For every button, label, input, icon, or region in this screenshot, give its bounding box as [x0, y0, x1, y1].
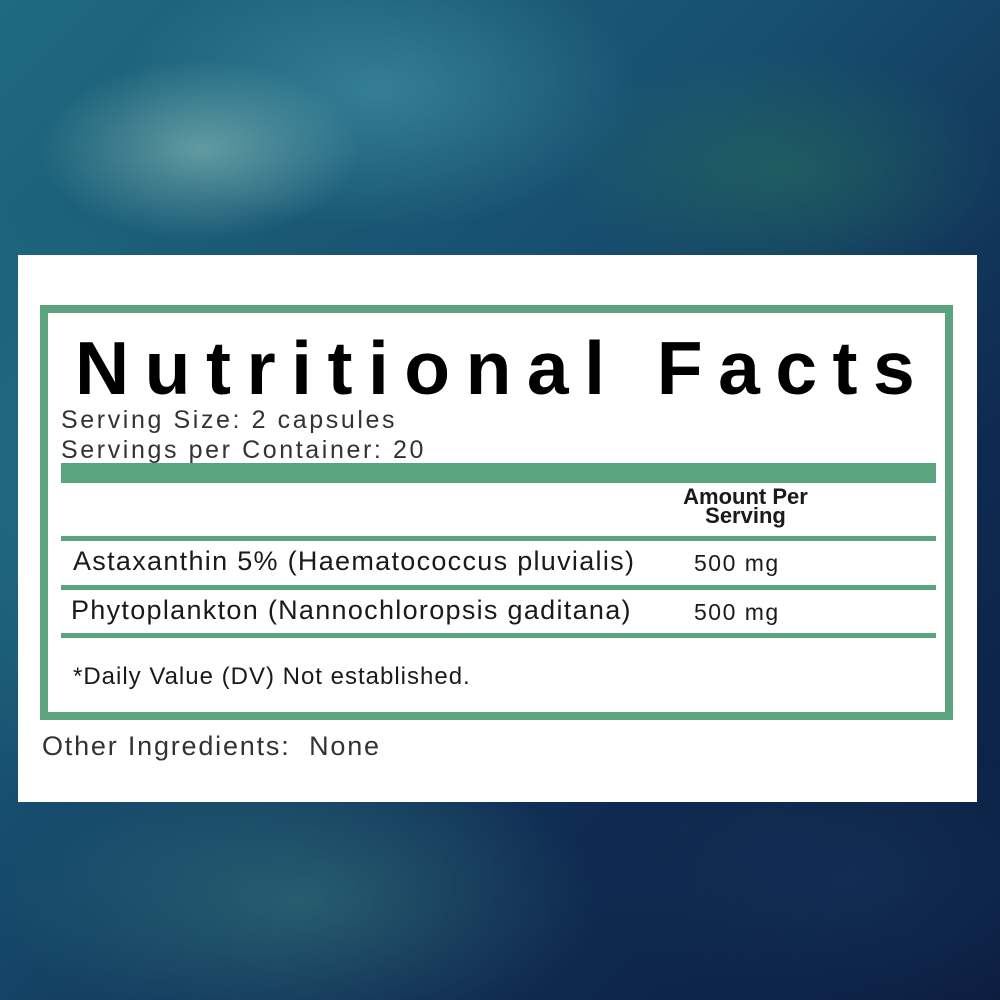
text: serving size: Serving Size: 2 capsules: [61, 406, 397, 434]
text: other ingredients: Other Ingredients: None: [42, 731, 381, 761]
title: Nutritional Facts: [75, 326, 930, 410]
row: phytoplankton: 500 mg: [694, 599, 780, 625]
text: servings per container: Servings per Container: 20: [61, 436, 426, 464]
column header: amount per serving: [683, 484, 808, 528]
panel: green bordered facts box: [40, 305, 953, 720]
column header: amount per serving: Serving: [705, 503, 786, 528]
footnote: daily value: *Daily Value (DV) Not established.: [73, 663, 471, 690]
row: astaxanthin: Astaxanthin 5% (Haematococcus pluvialis): [73, 546, 635, 576]
column header: amount per serving: Amount Per: [683, 484, 808, 509]
panel: label card: [18, 255, 977, 802]
row: phytoplankton: Phytoplankton (Nannochloropsis gaditana): [71, 595, 632, 625]
row: astaxanthin: 500 mg: [694, 550, 780, 576]
green header bar: [61, 463, 936, 483]
